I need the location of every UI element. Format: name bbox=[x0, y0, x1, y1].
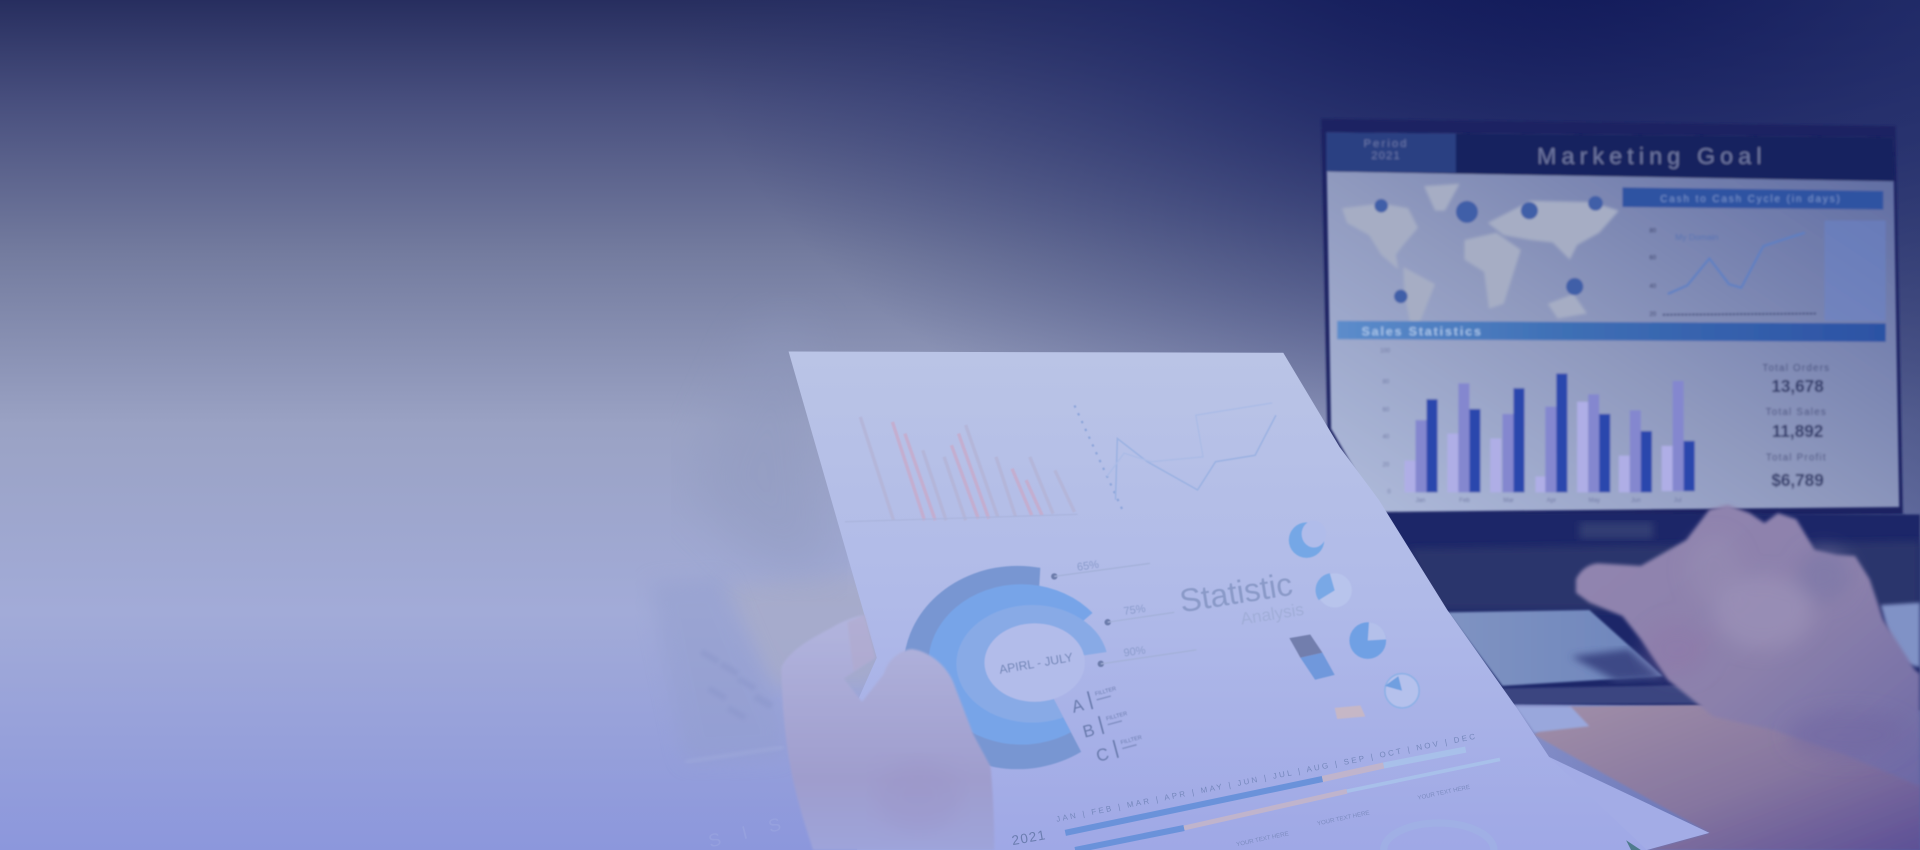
sales totals: Total Sales bbox=[1766, 407, 1827, 418]
percent callouts: 90% bbox=[1123, 644, 1147, 659]
month timeline: 2021 bbox=[1011, 827, 1048, 848]
bar chart: 20 bbox=[1382, 462, 1390, 469]
month timeline: YOUR TEXT HERE bbox=[1236, 830, 1289, 848]
line chart: 40 bbox=[1649, 283, 1657, 290]
printed report sheet bbox=[789, 352, 1709, 850]
period label: Period bbox=[1364, 138, 1409, 150]
bar chart: Mar bbox=[1503, 497, 1514, 504]
sales totals bbox=[1762, 363, 1830, 490]
bar chart: Jul bbox=[1674, 497, 1681, 504]
wooden table bbox=[1534, 704, 1920, 850]
statistic heading: Statistic bbox=[1177, 566, 1295, 619]
month timeline: YOUR TEXT HERE bbox=[1417, 784, 1471, 802]
percent callouts bbox=[1051, 559, 1196, 667]
laptop base and keyboard bbox=[1381, 512, 1920, 710]
bar chart: Apr bbox=[1547, 497, 1556, 504]
percent callouts: 75% bbox=[1123, 603, 1147, 618]
laptop screen: 2021 bbox=[1371, 150, 1401, 162]
bar chart: Feb bbox=[1459, 497, 1470, 504]
screen title: Marketing Goal bbox=[1537, 143, 1767, 169]
filter legend bbox=[1069, 684, 1146, 766]
cash cycle bar bbox=[1622, 187, 1883, 209]
month timeline: YOUR TEXT HERE bbox=[1317, 810, 1370, 827]
filter legend: A bbox=[1069, 694, 1086, 717]
month timeline: JAN | FEB | MAR | APR | MAY | JUN | JUL | AUG | SEP | OCT | NOV | DEC bbox=[1055, 732, 1478, 824]
bar chart: 40 bbox=[1382, 433, 1390, 440]
small pie charts bbox=[1289, 521, 1419, 708]
sales totals: 11,892 bbox=[1772, 421, 1823, 441]
world map bbox=[1342, 184, 1619, 326]
line chart: 80 bbox=[1649, 228, 1657, 235]
map pins bbox=[1374, 196, 1603, 303]
blurred desk and calculator bbox=[649, 318, 882, 850]
paper bar chart bbox=[845, 417, 1078, 522]
line chart bbox=[1649, 220, 1886, 321]
filter legend: FILLTER bbox=[1120, 735, 1143, 746]
laptop lid frame bbox=[1321, 119, 1903, 519]
paper line chart bbox=[1074, 403, 1276, 511]
donut centre label: APIRL - JULY bbox=[998, 650, 1074, 677]
right hand on laptop bbox=[1576, 505, 1920, 786]
laptop bbox=[1321, 119, 1920, 850]
sales totals: Total Profit bbox=[1766, 453, 1827, 464]
sales statistics bar bbox=[1337, 321, 1886, 342]
small sheet under report bbox=[1516, 707, 1589, 732]
bar chart: 80 bbox=[1382, 378, 1390, 385]
bar chart: 0 bbox=[1387, 489, 1391, 496]
bar chart: May bbox=[1589, 497, 1601, 504]
statistic heading: Analysis bbox=[1239, 599, 1305, 629]
line chart: 60 bbox=[1649, 255, 1657, 262]
screen header bbox=[1326, 132, 1894, 181]
filter legend: FILLTER bbox=[1094, 686, 1117, 698]
sales totals: Total Orders bbox=[1762, 363, 1830, 374]
bar chart: 100 bbox=[1380, 348, 1391, 355]
cash cycle bar: Cash to Cash Cycle (in days) bbox=[1660, 194, 1842, 205]
sales statistics bar: Sales Statistics bbox=[1362, 325, 1483, 339]
left hand holding paper bbox=[781, 615, 994, 850]
line chart: My Domain bbox=[1675, 232, 1719, 242]
sales totals: 13,678 bbox=[1771, 376, 1824, 396]
filter legend: C bbox=[1094, 743, 1111, 766]
filter legend: B bbox=[1080, 719, 1097, 742]
bar chart: Jan bbox=[1415, 497, 1425, 504]
filter legend: FILLTER bbox=[1106, 711, 1128, 722]
laptop screen bbox=[1326, 132, 1899, 512]
line chart: 20 bbox=[1649, 311, 1657, 318]
bar chart: 60 bbox=[1382, 407, 1390, 414]
stacked bar swatch bbox=[1289, 634, 1365, 719]
month timeline bbox=[1011, 732, 1641, 850]
donut chart bbox=[905, 566, 1106, 770]
bar chart bbox=[1380, 348, 1695, 504]
percent callouts: 65% bbox=[1076, 559, 1100, 574]
sales totals: $6,789 bbox=[1771, 470, 1824, 490]
bar chart: Jun bbox=[1631, 497, 1641, 504]
